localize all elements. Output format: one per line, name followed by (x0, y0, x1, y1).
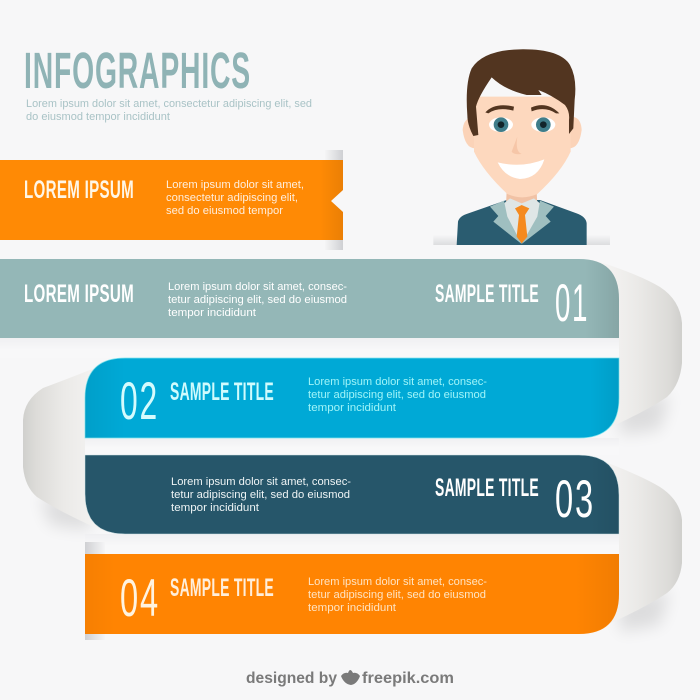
intro text: Lorem ipsum dolor sit amet, consectetur adipiscing elit, sed (26, 98, 312, 110)
step 04 text: tempor incididunt (308, 602, 396, 614)
banner heading: LOREM IPSUM (24, 176, 134, 204)
step 01 text (168, 281, 347, 319)
step 03 text: tetur adipiscing elit, sed do eiusmod (171, 489, 350, 501)
panel: left curl (23, 364, 105, 532)
panel: right curl 2 (600, 460, 682, 628)
panel: step 01 (0, 259, 619, 338)
step 01 text: tetur adipiscing elit, sed do eiusmod (168, 294, 347, 306)
step 04 text: tetur adipiscing elit, sed do eiusmod (308, 589, 486, 601)
icon: freepik logo (341, 670, 360, 685)
step 04 title: SAMPLE TITLE (170, 574, 274, 602)
banner text: Lorem ipsum dolor sit amet, (166, 179, 304, 191)
step 01 text: tempor incididunt (168, 307, 256, 319)
panel: right curl 1 (600, 262, 682, 432)
step 01 heading: LOREM IPSUM (24, 280, 134, 308)
step 03 title: SAMPLE TITLE (435, 474, 539, 502)
step 01 title: SAMPLE TITLE (435, 280, 539, 308)
intro text: do eiusmod tempor incididunt (26, 111, 170, 123)
panel: top orange banner (0, 150, 343, 250)
step 02 text (308, 376, 487, 414)
panel: step 04 (85, 542, 619, 640)
step 03 text: tempor incididunt (171, 502, 259, 514)
step 02 text: tempor incididunt (308, 402, 396, 414)
panel: step 03 (85, 455, 619, 534)
illustration: businessman (433, 49, 610, 245)
step 01 number: 01 (555, 274, 589, 333)
banner text: sed do eiusmod tempor (166, 205, 283, 217)
step 03 number: 03 (555, 470, 595, 529)
step 03 text: Lorem ipsum dolor sit amet, consec- (171, 476, 351, 488)
footer credit (246, 670, 454, 687)
panel: step 02 (85, 358, 619, 438)
footer credit: freepik.com (362, 670, 454, 687)
footer credit: designed by (246, 670, 337, 687)
step 04 text (308, 576, 487, 614)
step 04 text: Lorem ipsum dolor sit amet, consec- (308, 576, 487, 588)
gaps between bands (0, 338, 619, 358)
banner text (166, 179, 304, 217)
step 04 number: 04 (120, 569, 160, 628)
step 01 text: Lorem ipsum dolor sit amet, consec- (168, 281, 347, 293)
curl shadows (40, 395, 670, 632)
step 02 text: tetur adipiscing elit, sed do eiusmod (308, 389, 486, 401)
step 02 title: SAMPLE TITLE (170, 378, 274, 406)
intro text (26, 98, 312, 123)
step 02 number: 02 (120, 372, 159, 431)
title: INFOGRAPHICS (24, 42, 251, 99)
step 03 text (171, 476, 351, 514)
step 02 text: Lorem ipsum dolor sit amet, consec- (308, 376, 487, 388)
banner text: consectetur adipiscing elit, (166, 192, 298, 204)
